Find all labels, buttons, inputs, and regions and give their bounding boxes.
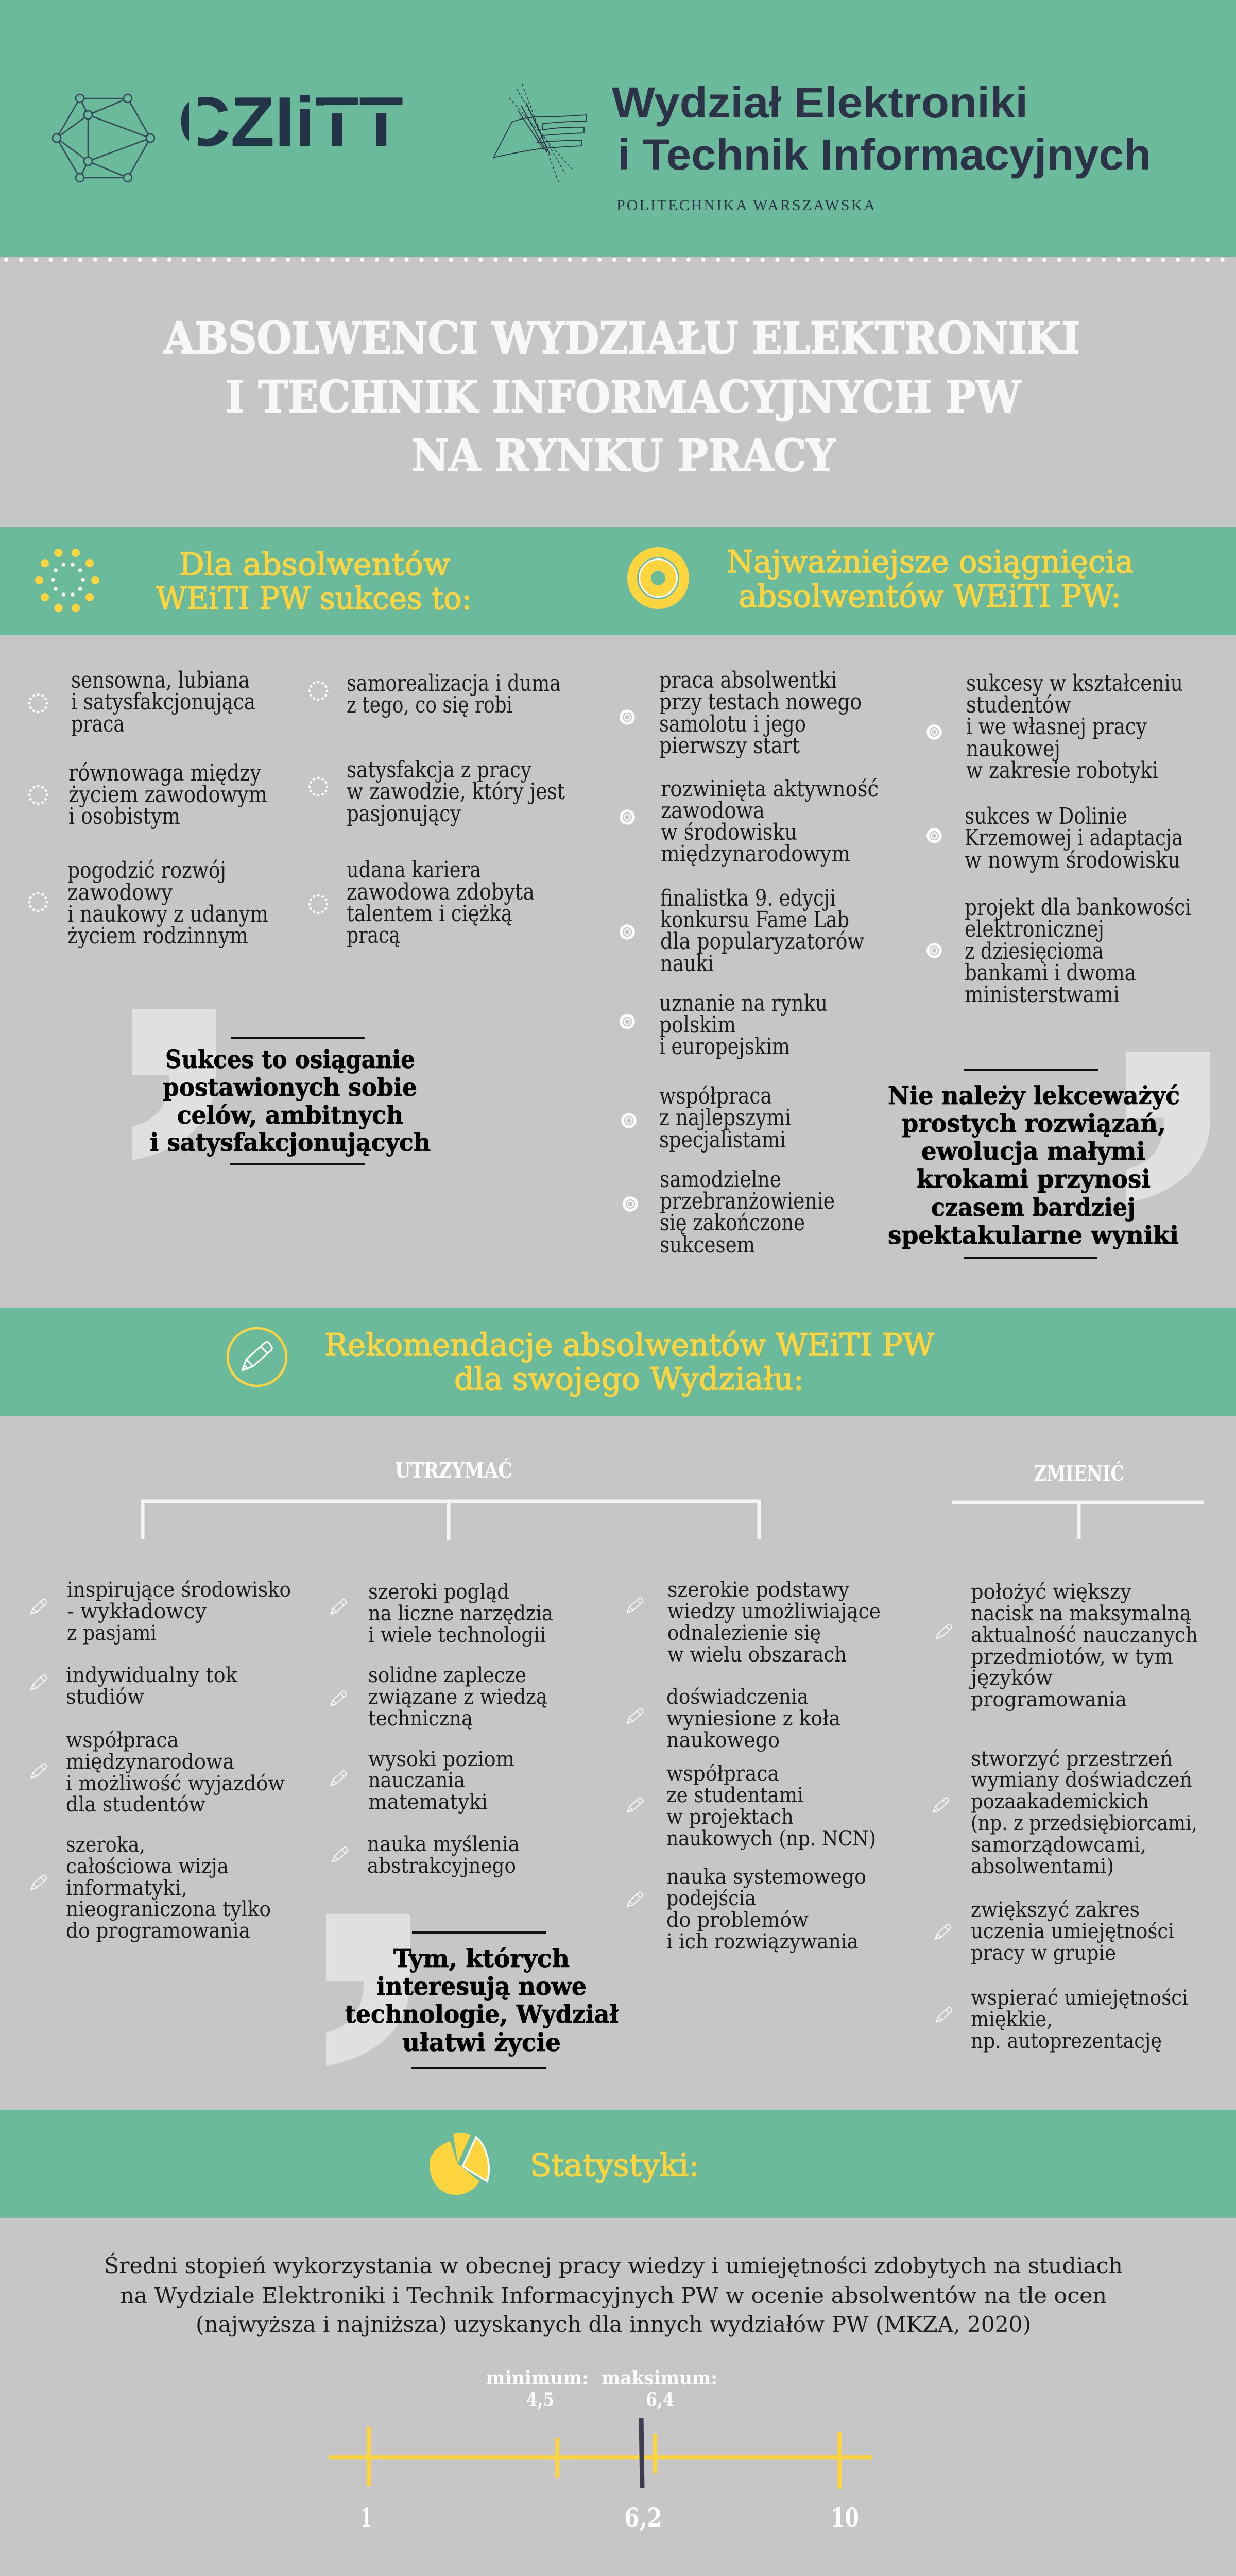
list item: współpraca międzynarodowa <box>31 1728 285 1817</box>
list item: zwiększyć zakres: pracy w grupie <box>971 1941 1116 1965</box>
list item: szerokie podstawy: wiedzy umożliwiające <box>667 1600 881 1623</box>
list item: stworzyć przestrzeń: pozaakademickich <box>971 1790 1149 1814</box>
heading: ZMIENIĆ: ZMIENIĆ <box>1034 1461 1124 1486</box>
list item: równowaga: życiem zawodowym <box>68 782 267 808</box>
label: maksimum: 6,4 <box>646 2389 674 2411</box>
callout: Nie należy lekceważyć: krokami przynosi <box>917 1165 1151 1194</box>
list item: praca absolwentki <box>621 667 862 759</box>
list item: sukcesy w kształceniu: studentów <box>966 692 1071 718</box>
scale axis <box>329 2427 872 2489</box>
list item: szeroka wizja: do programowania <box>66 1919 250 1943</box>
list item: wspierać umiejętności <box>936 1986 1188 2053</box>
list item: projekt dla bankowości: ministerstwami <box>965 981 1120 1008</box>
bracket: utrzymać <box>143 1501 759 1540</box>
list item: współpraca <box>623 1083 791 1153</box>
list item: szeroka wizja <box>31 1833 271 1943</box>
heading: UTRZYMAĆ: UTRZYMAĆ <box>395 1458 512 1483</box>
list item: wspierać umiejętności: miękkie, <box>971 2008 1053 2031</box>
list item: położyć większy nacisk: przedmiotów, w tym <box>971 1645 1173 1669</box>
list item: indywidualny tok: studiów <box>66 1685 144 1709</box>
list item: szeroka wizja: szeroka, <box>66 1833 145 1857</box>
panel: list of success definitions <box>29 667 565 949</box>
list item: rozwinięta aktywność: w środowisku <box>661 819 797 845</box>
label: maksimum <box>602 2367 717 2411</box>
list item: stworzyć przestrzeń: (np. z przedsiębiorcami, <box>971 1811 1197 1835</box>
heading: Statystyki: Statystyki: <box>530 2147 699 2183</box>
list item: indywidualny tok: indywidualny tok <box>66 1664 238 1687</box>
list item: szeroka wizja: całościowa wizja <box>66 1855 229 1878</box>
panel: recommendations to change <box>933 1580 1198 2053</box>
list item: wysoki poziom <box>331 1748 514 1814</box>
list item: współpraca: współpraca <box>659 1083 772 1109</box>
list item: samodzielne przebranżowienie: się zakończone <box>660 1210 805 1236</box>
logo: faculty name: Wydział Elektroniki <box>612 78 1028 127</box>
logo: Politechnika Warszawska caption: POLITECHNIKA WARSZAWSKA <box>616 197 875 214</box>
list item: rozwinięta aktywność <box>621 776 879 867</box>
list item: szeroki pogląd: szeroki pogląd <box>368 1580 509 1604</box>
list item: nauka systemowego podejścia: podejścia <box>666 1887 756 1910</box>
list item: wspierać umiejętności: wspierać umiejętności <box>971 1986 1188 2010</box>
callout: Tym, których <box>326 1914 619 2069</box>
marker: 6,2 <box>641 2418 642 2488</box>
panel: statistics band <box>0 2110 1236 2218</box>
list item: współpraca: z najlepszymi <box>659 1105 791 1131</box>
list item: doświadczenia: wyniesione z koła <box>666 1707 840 1731</box>
list item: współpraca ze studentami: w projektach <box>666 1805 794 1829</box>
list item: finalistka: konkursu Fame Lab <box>660 907 849 933</box>
list item: nauka myślenia: nauka myślenia <box>367 1833 520 1856</box>
list item: doświadczenia: doświadczenia <box>666 1685 809 1709</box>
list item: współpraca międzynarodowa: i możliwość wyjazdów <box>66 1772 285 1795</box>
list item: solidne zaplecze: techniczną <box>368 1707 473 1731</box>
list item: satysfakcja z pracy: satysfakcja z pracy <box>347 757 531 783</box>
list item: inspirujące środowisko: inspirujące środowisko <box>67 1578 291 1602</box>
heading: Dla absolwentów: Dla absolwentów <box>179 547 450 583</box>
list item: położyć większy nacisk: położyć większy <box>971 1580 1131 1604</box>
list item: położyć większy nacisk: języków <box>969 1666 1053 1690</box>
list item: sukcesy w kształceniu <box>928 670 1183 784</box>
scale values: 10 <box>831 2502 859 2533</box>
panel: list of achievements <box>621 667 1191 1258</box>
list item: Dolina Krzemowa: Krzemowej i adaptacja <box>965 825 1183 851</box>
list item: szerokie podstawy: w wielu obszarach <box>667 1643 847 1667</box>
heading: Dla absolwentów <box>156 547 472 617</box>
callout: Tym, których: interesują nowe <box>376 1972 587 2001</box>
list item: solidne zaplecze: związane z wiedzą <box>368 1685 547 1709</box>
list item: rozwinięta aktywność: zawodowa <box>661 798 765 824</box>
heading: Dla absolwentów: WEiTI PW sukces to: <box>156 581 472 617</box>
list item: wysoki poziom: wysoki poziom <box>368 1748 514 1771</box>
scale values <box>361 2502 859 2533</box>
list item: samorealizacja: samorealizacja i duma <box>347 670 561 697</box>
callout: Nie należy lekceważyć: spektakularne wyniki <box>888 1221 1179 1250</box>
callout: Nie należy lekceważyć: Nie należy lekceważyć <box>888 1081 1180 1110</box>
chart: usefulness scale <box>329 2367 872 2533</box>
label: minimum: 4,5 <box>526 2389 554 2411</box>
list item: inspirujące środowisko: - wykładowcy <box>67 1600 207 1623</box>
panel: recommendations to keep, column 3 <box>627 1578 881 1954</box>
list item: doświadczenia: naukowego <box>666 1728 780 1752</box>
list item: udana kariera: pracą <box>347 922 400 948</box>
callout: Nie należy lekceważyć <box>888 1052 1210 1259</box>
list item: nauka myślenia <box>332 1833 520 1878</box>
panel: recommendations band <box>0 1308 1236 1416</box>
label: maksimum: maksimum: <box>602 2367 717 2389</box>
logo: CZIiTT network icon <box>53 94 154 182</box>
list item: pogodzić rozwój: i naukowy z udanym <box>67 901 268 927</box>
title: NA RYNKU PRACY <box>411 430 836 482</box>
callout: Sukces: postawionych sobie <box>163 1073 417 1102</box>
list item: finalistka: dla popularyzatorów <box>660 928 864 955</box>
heading: Rekomendacje: dla swojego Wydziału: <box>454 1361 804 1397</box>
text: scale description <box>104 2252 1123 2337</box>
list item: projekt dla bankowości: bankami i dwoma <box>965 960 1136 986</box>
list item: nauka systemowego podejścia: do problemów <box>666 1908 809 1932</box>
list item: doświadczenia <box>627 1685 840 1752</box>
list item: nauka systemowego podejścia <box>627 1865 866 1954</box>
list item: nauka systemowego podejścia: i ich rozwiązywania <box>666 1930 859 1954</box>
list item: samorealizacja: z tego, co się robi <box>347 692 512 718</box>
list item: sensowna praca: sensowna, lubiana <box>71 667 250 693</box>
callout: Nie należy lekceważyć: czasem bardziej <box>931 1193 1136 1222</box>
list item: rozwinięta aktywność: międzynarodowym <box>661 841 850 867</box>
list item: stworzyć przestrzeń: samorządowcami, <box>971 1833 1146 1857</box>
list item: projekt dla bankowości: projekt dla bankowości <box>965 894 1191 921</box>
title: ABSOLWENCI WYDZIAŁU ELEKTRONIKI <box>163 313 1080 364</box>
list item: sukcesy w kształceniu: sukcesy w kształceniu <box>966 670 1183 697</box>
list item: stworzyć przestrzeń: stworzyć przestrzeń <box>971 1747 1173 1771</box>
heading: Najważniejsze osiągnięcia <box>727 544 1134 615</box>
list item: praca absolwentki: pierwszy start <box>659 733 800 759</box>
list item: Dolina Krzemowa: sukces w Dolinie <box>965 803 1127 829</box>
list item: nauka myślenia: abstrakcyjnego <box>367 1854 516 1878</box>
logo: faculty wing icon <box>493 84 587 184</box>
list item: satysfakcja z pracy <box>310 757 565 827</box>
logo: faculty name: i Technik Informacyjnych <box>617 130 1151 179</box>
panel: header with logos <box>0 0 1236 257</box>
list item: solidne zaplecze <box>331 1664 547 1731</box>
list item: szerokie podstawy <box>627 1578 881 1667</box>
list item: finalistka <box>621 885 864 977</box>
list item: współpraca: specjalistami <box>659 1127 786 1153</box>
list item: sensowna praca <box>29 667 255 737</box>
list item: praca absolwentki: samolotu i jego <box>659 711 806 737</box>
callout: Nie należy lekceważyć: prostych rozwiązań, <box>902 1109 1166 1138</box>
list item: równowaga: i osobistym <box>68 803 180 829</box>
list item: współpraca ze studentami: ze studentami <box>666 1784 803 1807</box>
logo: CZIiTT wordmark: CZIiTT <box>178 82 403 161</box>
list item: współpraca międzynarodowa: międzynarodowa <box>66 1750 234 1774</box>
list item: położyć większy nacisk <box>936 1580 1198 1711</box>
list item: inspirujące środowisko: z pasjami <box>67 1621 157 1645</box>
text: scale description: (najwyższa i najniższa) uzyskanych dla innych wydziałów PW (MKZA, 2020) <box>196 2312 1031 2337</box>
list item: projekt dla bankowości: z dziesięcioma <box>965 938 1104 964</box>
list item: praca absolwentki: przy testach nowego <box>659 689 862 715</box>
icon: target <box>627 547 689 609</box>
text: scale description: na Wydziale Elektroniki i Technik Informacyjnych PW w ocenie absolwentów na tle ocen <box>120 2283 1107 2308</box>
list item: współpraca ze studentami <box>627 1762 876 1851</box>
list item: szeroka wizja: nieograniczona tylko <box>66 1897 271 1921</box>
heading: Rekomendacje <box>324 1327 934 1397</box>
list item: satysfakcja z pracy: w zawodzie, który jest <box>347 778 565 805</box>
icon: pencil in circle <box>228 1328 286 1386</box>
list item: pogodzić rozwój: zawodowy <box>67 879 173 906</box>
list item: samodzielne przebranżowienie <box>624 1166 835 1258</box>
list item: zwiększyć zakres: uczenia umiejętności <box>971 1920 1174 1943</box>
list item: sukcesy w kształceniu: i we własnej pracy <box>966 714 1147 740</box>
list item: sensowna praca: i satysfakcjonująca <box>71 689 255 715</box>
list item: uznanie: uznanie na rynku <box>659 990 828 1016</box>
list item: samodzielne przebranżowienie: samodzielne <box>660 1166 781 1193</box>
list item: szeroki pogląd: i wiele technologii <box>368 1623 546 1647</box>
list item: solidne zaplecze: solidne zaplecze <box>368 1664 526 1687</box>
panel: band with two section headings <box>0 527 1236 635</box>
callout: Nie należy lekceważyć: ewolucja małymi <box>921 1137 1145 1166</box>
callout: Sukces <box>132 1009 431 1165</box>
icon: pie chart <box>430 2133 489 2195</box>
list item: położyć większy nacisk: programowania <box>971 1688 1127 1711</box>
callout: Tym, których: technologie, Wydział <box>345 2000 619 2029</box>
list item: satysfakcja z pracy: pasjonujący <box>347 801 461 827</box>
title: I TECHNIK INFORMACYJNYCH PW <box>226 371 1021 423</box>
list item: stworzyć przestrzeń <box>933 1747 1197 1878</box>
text: scale description: Średni stopień wykorzystania w obecnej pracy wiedzy i umiejętności zdobytych na studiach <box>104 2252 1123 2278</box>
scale values: 6,2 <box>624 2502 662 2533</box>
list item: współpraca międzynarodowa: dla studentów <box>66 1793 205 1817</box>
list item: Dolina Krzemowa <box>928 803 1183 873</box>
logo: faculty name <box>612 78 1151 179</box>
list item: finalistka: finalistka 9. edycji <box>660 885 836 911</box>
divider dots top <box>6 258 1234 262</box>
heading: Rekomendacje: Rekomendacje absolwentów WEiTI PW <box>324 1327 934 1363</box>
label: minimum: minimum: <box>486 2367 589 2389</box>
list item: inspirujące środowisko <box>31 1578 291 1645</box>
bracket: zmienić <box>952 1502 1204 1539</box>
list item: sukcesy w kształceniu: w zakresie robotyki <box>966 757 1158 784</box>
callout: Sukces: Sukces to osiąganie <box>165 1045 415 1074</box>
list item: zwiększyć zakres <box>935 1898 1174 1965</box>
list item: pogodzić rozwój: życiem rodzinnym <box>67 923 248 949</box>
icon: dotted circle <box>35 549 99 612</box>
list item: uznanie <box>621 990 828 1060</box>
list item: szeroki pogląd: na liczne narzędzia <box>368 1602 553 1625</box>
list item: sukcesy w kształceniu: naukowej <box>966 736 1060 762</box>
list item: uznanie: i europejskim <box>659 1033 790 1060</box>
list item: pogodzić rozwój: pogodzić rozwój <box>67 857 226 884</box>
list item: pogodzić rozwój <box>29 857 268 949</box>
list item: stworzyć przestrzeń: wymiany doświadczeń <box>971 1768 1192 1792</box>
list item: samodzielne przebranżowienie: przebranżowienie <box>660 1188 835 1214</box>
list item: współpraca ze studentami: współpraca <box>666 1762 779 1786</box>
list item: szerokie podstawy: szerokie podstawy <box>667 1578 849 1602</box>
callout: Tym, których: ułatwi życie <box>402 2028 561 2057</box>
list item: finalistka: nauki <box>660 951 714 977</box>
list item: sensowna praca: praca <box>71 711 125 737</box>
list item: udana kariera <box>310 857 535 948</box>
list item: udana kariera: talentem i ciężką <box>347 901 512 927</box>
heading: Najważniejsze osiągnięcia: absolwentów WEiTI PW: <box>739 579 1121 615</box>
list item: indywidualny tok <box>31 1664 238 1709</box>
list item: wspierać umiejętności: np. autoprezentację <box>971 2029 1162 2053</box>
list item: szeroka wizja: informatyki, <box>66 1876 187 1900</box>
title <box>163 313 1080 482</box>
callout: Tym, których: Tym, których <box>393 1944 570 1973</box>
list item: położyć większy nacisk: aktualność nauczanych <box>971 1623 1198 1647</box>
list item: równowaga: równowaga między <box>68 760 261 786</box>
callout: Sukces: celów, ambitnych <box>177 1101 403 1130</box>
list item: zwiększyć zakres: zwiększyć zakres <box>971 1898 1140 1922</box>
list item: wysoki poziom: matematyki <box>368 1790 488 1814</box>
label: minimum <box>486 2367 589 2411</box>
list item: samorealizacja <box>310 670 561 718</box>
list item: współpraca międzynarodowa: współpraca <box>66 1728 179 1752</box>
list item: współpraca ze studentami: naukowych (np. NCN) <box>666 1827 876 1851</box>
heading: Najważniejsze osiągnięcia: Najważniejsze osiągnięcia <box>727 544 1134 580</box>
panel: recommendations to keep, column 1 <box>31 1578 291 1943</box>
panel: recommendations to keep, column 2 <box>331 1580 553 1878</box>
callout: Sukces: i satysfakcjonujących <box>150 1128 431 1157</box>
list item: uznanie: polskim <box>659 1012 736 1038</box>
list item: Dolina Krzemowa: w nowym środowisku <box>965 847 1180 873</box>
list item: nauka systemowego podejścia: nauka systemowego <box>666 1865 866 1889</box>
list item: praca absolwentki: praca absolwentki <box>659 667 837 693</box>
list item: położyć większy nacisk: nacisk na maksymalną <box>971 1602 1191 1625</box>
scale values: 1 <box>361 2502 372 2533</box>
list item: projekt dla bankowości: elektronicznej <box>965 916 1104 942</box>
list item: projekt dla bankowości <box>928 894 1191 1008</box>
list item: rozwinięta aktywność: rozwinięta aktywność <box>661 776 879 802</box>
list item: równowaga <box>29 760 267 829</box>
list item: udana kariera: udana kariera <box>347 857 481 883</box>
list item: samodzielne przebranżowienie: sukcesem <box>660 1232 755 1258</box>
list item: szerokie podstawy: odnalezienie się <box>667 1621 821 1645</box>
list item: udana kariera: zawodowa zdobyta <box>347 879 535 905</box>
list item: szeroki pogląd <box>331 1580 553 1647</box>
list item: wysoki poziom: nauczania <box>368 1769 465 1792</box>
list item: stworzyć przestrzeń: absolwentami) <box>971 1855 1114 1878</box>
